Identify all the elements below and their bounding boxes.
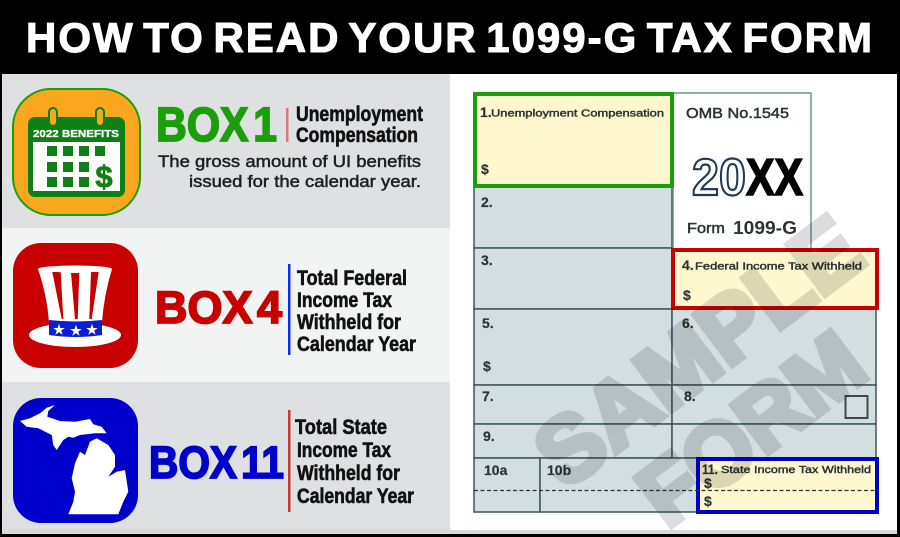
form id cell: 1099-G [733,218,797,238]
checkbox [846,396,868,418]
heading: total federal income tax withheld: Total Federal [297,267,407,290]
box 4 highlight [673,250,877,308]
heading: total state income tax withheld: Total State [295,416,387,439]
heading: unemployment compensation [296,103,423,147]
cell labels: 8. [684,388,696,404]
description [158,152,421,191]
heading: total state income tax withheld: Income Tax [297,439,391,462]
cell labels: 7. [482,388,494,404]
cell labels: $ [483,358,491,374]
box 1 highlight: $ [481,161,489,177]
icon: uncle sam hat: ★ [53,322,65,337]
box 11 highlight: $ [704,475,712,491]
description: The gross amount of UI benefits [158,152,421,171]
form id cell: XX [746,149,803,207]
cell labels: 2. [481,194,493,210]
icon: uncle sam hat: ★ [70,323,82,338]
cell labels: 10b [547,462,571,478]
cell labels [481,194,696,478]
heading: total federal income tax withheld [297,267,416,356]
heading: total state income tax withheld [295,416,414,508]
heading: total federal income tax withheld: Withheld for [297,311,401,334]
box 4 highlight: 4. [682,257,694,273]
watermark: SAMPLE [516,197,881,507]
box 11 highlight: 11. [702,461,718,477]
box 1 highlight [475,94,672,186]
box 11 highlight: State Income Tax Withheld [721,464,871,476]
title: HOW TO READ YOUR 1099-G TAX FORM [26,14,872,61]
icon: uncle sam hat: ★ [86,322,98,337]
label: BOX 1: BOX 1 [156,99,277,152]
heading: total federal income tax withheld: Income Tax [297,289,392,312]
heading: total state income tax withheld: Withheld for [297,462,400,485]
panel: box 1 [2,74,450,228]
panel: sample form [450,74,897,537]
grey form cells [474,187,876,512]
label: BOX 4: BOX 4 [155,282,282,333]
form id cell: OMB No.1545 [686,105,789,122]
heading: total state income tax withheld: Calendar Year [297,485,414,508]
label: BOX 11: BOX 11 [149,437,284,488]
box 4 highlight: Federal Income Tax Withheld [695,260,862,272]
heading: unemployment compensation: Compensation [296,124,418,147]
dashed divider [474,490,876,492]
panel: box 11 [2,382,450,529]
cell labels: 3. [481,252,493,268]
heading: unemployment compensation: Unemployment [296,103,423,126]
icon: benefits calendar: $ [95,159,113,194]
form id cell: Form [687,220,725,237]
cell labels: 10a [484,462,508,478]
cell labels: 6. [682,315,694,331]
icon: uncle sam hat [13,243,138,368]
icon: benefits calendar [13,89,140,215]
cell labels: 9. [483,428,495,444]
description: issued for the calendar year. [189,172,421,191]
icon: michigan map [13,398,138,523]
box 11 highlight [698,459,877,512]
heading: total federal income tax withheld: Calendar Year [297,333,416,356]
form id cell [673,93,811,250]
form id cell: 20 [692,149,746,207]
box 4 highlight: $ [683,287,691,303]
box 1 highlight: 1. [480,104,492,120]
box 11 highlight: $ [704,493,712,509]
panel: box 4 [2,228,450,382]
cell labels: 5. [482,315,494,331]
icon: benefits calendar: 2022 BENEFITS [33,129,119,140]
box 1 highlight: Unemployment Compensation [491,108,664,120]
